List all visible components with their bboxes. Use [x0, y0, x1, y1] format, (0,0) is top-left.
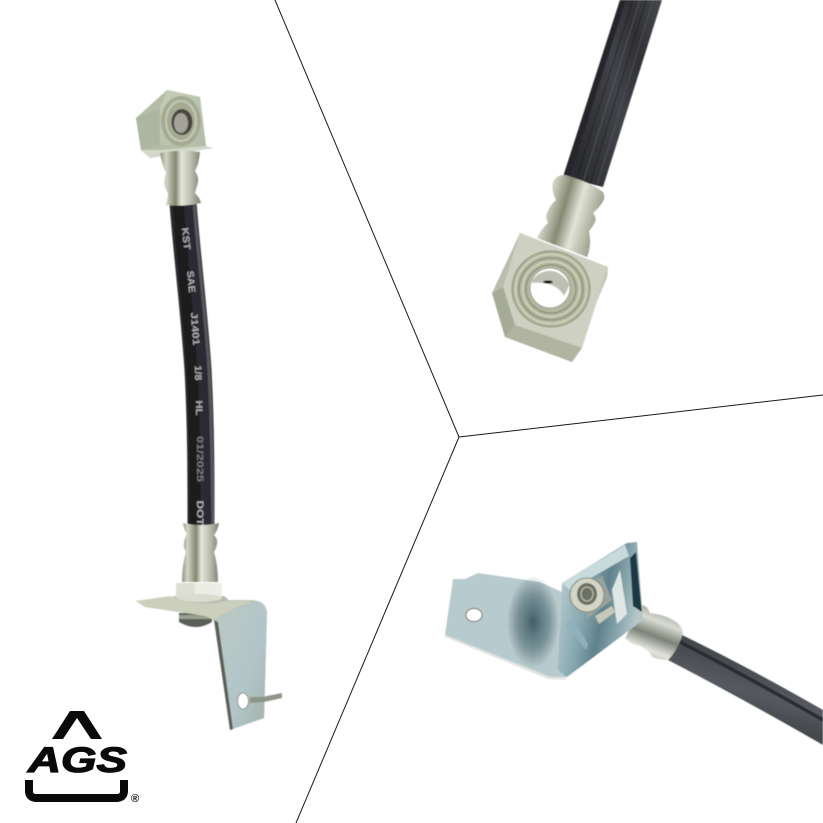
hose markings: J1401 [188, 312, 201, 347]
AGS logo [27, 711, 139, 805]
logo wordmark: AGS [27, 741, 127, 780]
registered mark: ® [131, 793, 139, 805]
square block [492, 233, 608, 362]
thread rings and bore [512, 251, 590, 327]
hose markings: 1/8 [192, 365, 203, 381]
top right view: fitting close-up [492, 0, 662, 362]
hose markings [179, 227, 205, 526]
mounting hole and tab [238, 693, 282, 709]
divider lines [275, 0, 823, 823]
bottom right view: bracket close-up [445, 542, 823, 745]
bottom crimp collar [182, 523, 219, 582]
logo bottom bracket [29, 780, 124, 798]
hose section [563, 0, 662, 187]
hose markings: SAE [184, 270, 197, 293]
threaded nut [570, 576, 615, 624]
hose markings: 01/2025 [194, 436, 205, 483]
lower bracket [136, 596, 282, 730]
nut and washer [170, 583, 228, 627]
crimp collar [625, 605, 683, 660]
left view: full brake hose [136, 90, 282, 730]
flat bracket arm [445, 573, 567, 680]
hose markings: DOT [194, 500, 205, 526]
hose section [668, 635, 823, 745]
hose markings: HL [193, 400, 204, 416]
top crimp collar [160, 151, 201, 206]
top fitting block [136, 90, 213, 158]
logo top chevron [52, 711, 102, 739]
hose markings: KST [179, 227, 192, 250]
hose body with printed markings [178, 203, 213, 526]
angled bracket plate [558, 542, 643, 677]
crimp collar [537, 175, 604, 257]
